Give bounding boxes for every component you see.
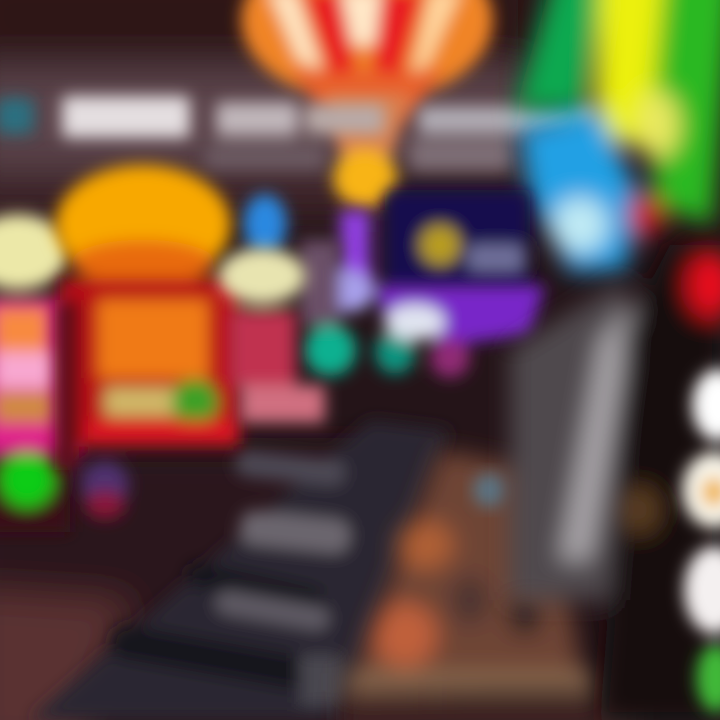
floor: patterned orange carpet — [340, 450, 640, 720]
icons: white discs along the right edge — [682, 369, 720, 712]
column: grey railing and black pillar — [510, 245, 720, 720]
background: ceiling, wall band and floor — [0, 0, 530, 720]
hot air balloon decoration — [241, 0, 493, 208]
floor: dark stepped walkway — [30, 420, 450, 720]
title: illegible blurred heading — [0, 96, 593, 170]
slot machine: centre — [55, 165, 240, 519]
slot machine: left — [0, 214, 80, 532]
lights: purple and teal cluster — [300, 240, 545, 378]
slot machine: right — [218, 248, 325, 423]
lights: green, yellow and blue glow — [515, 0, 720, 272]
panel: navy screen with yellow dot — [243, 190, 530, 290]
icon: small blue floor marker — [473, 473, 507, 507]
